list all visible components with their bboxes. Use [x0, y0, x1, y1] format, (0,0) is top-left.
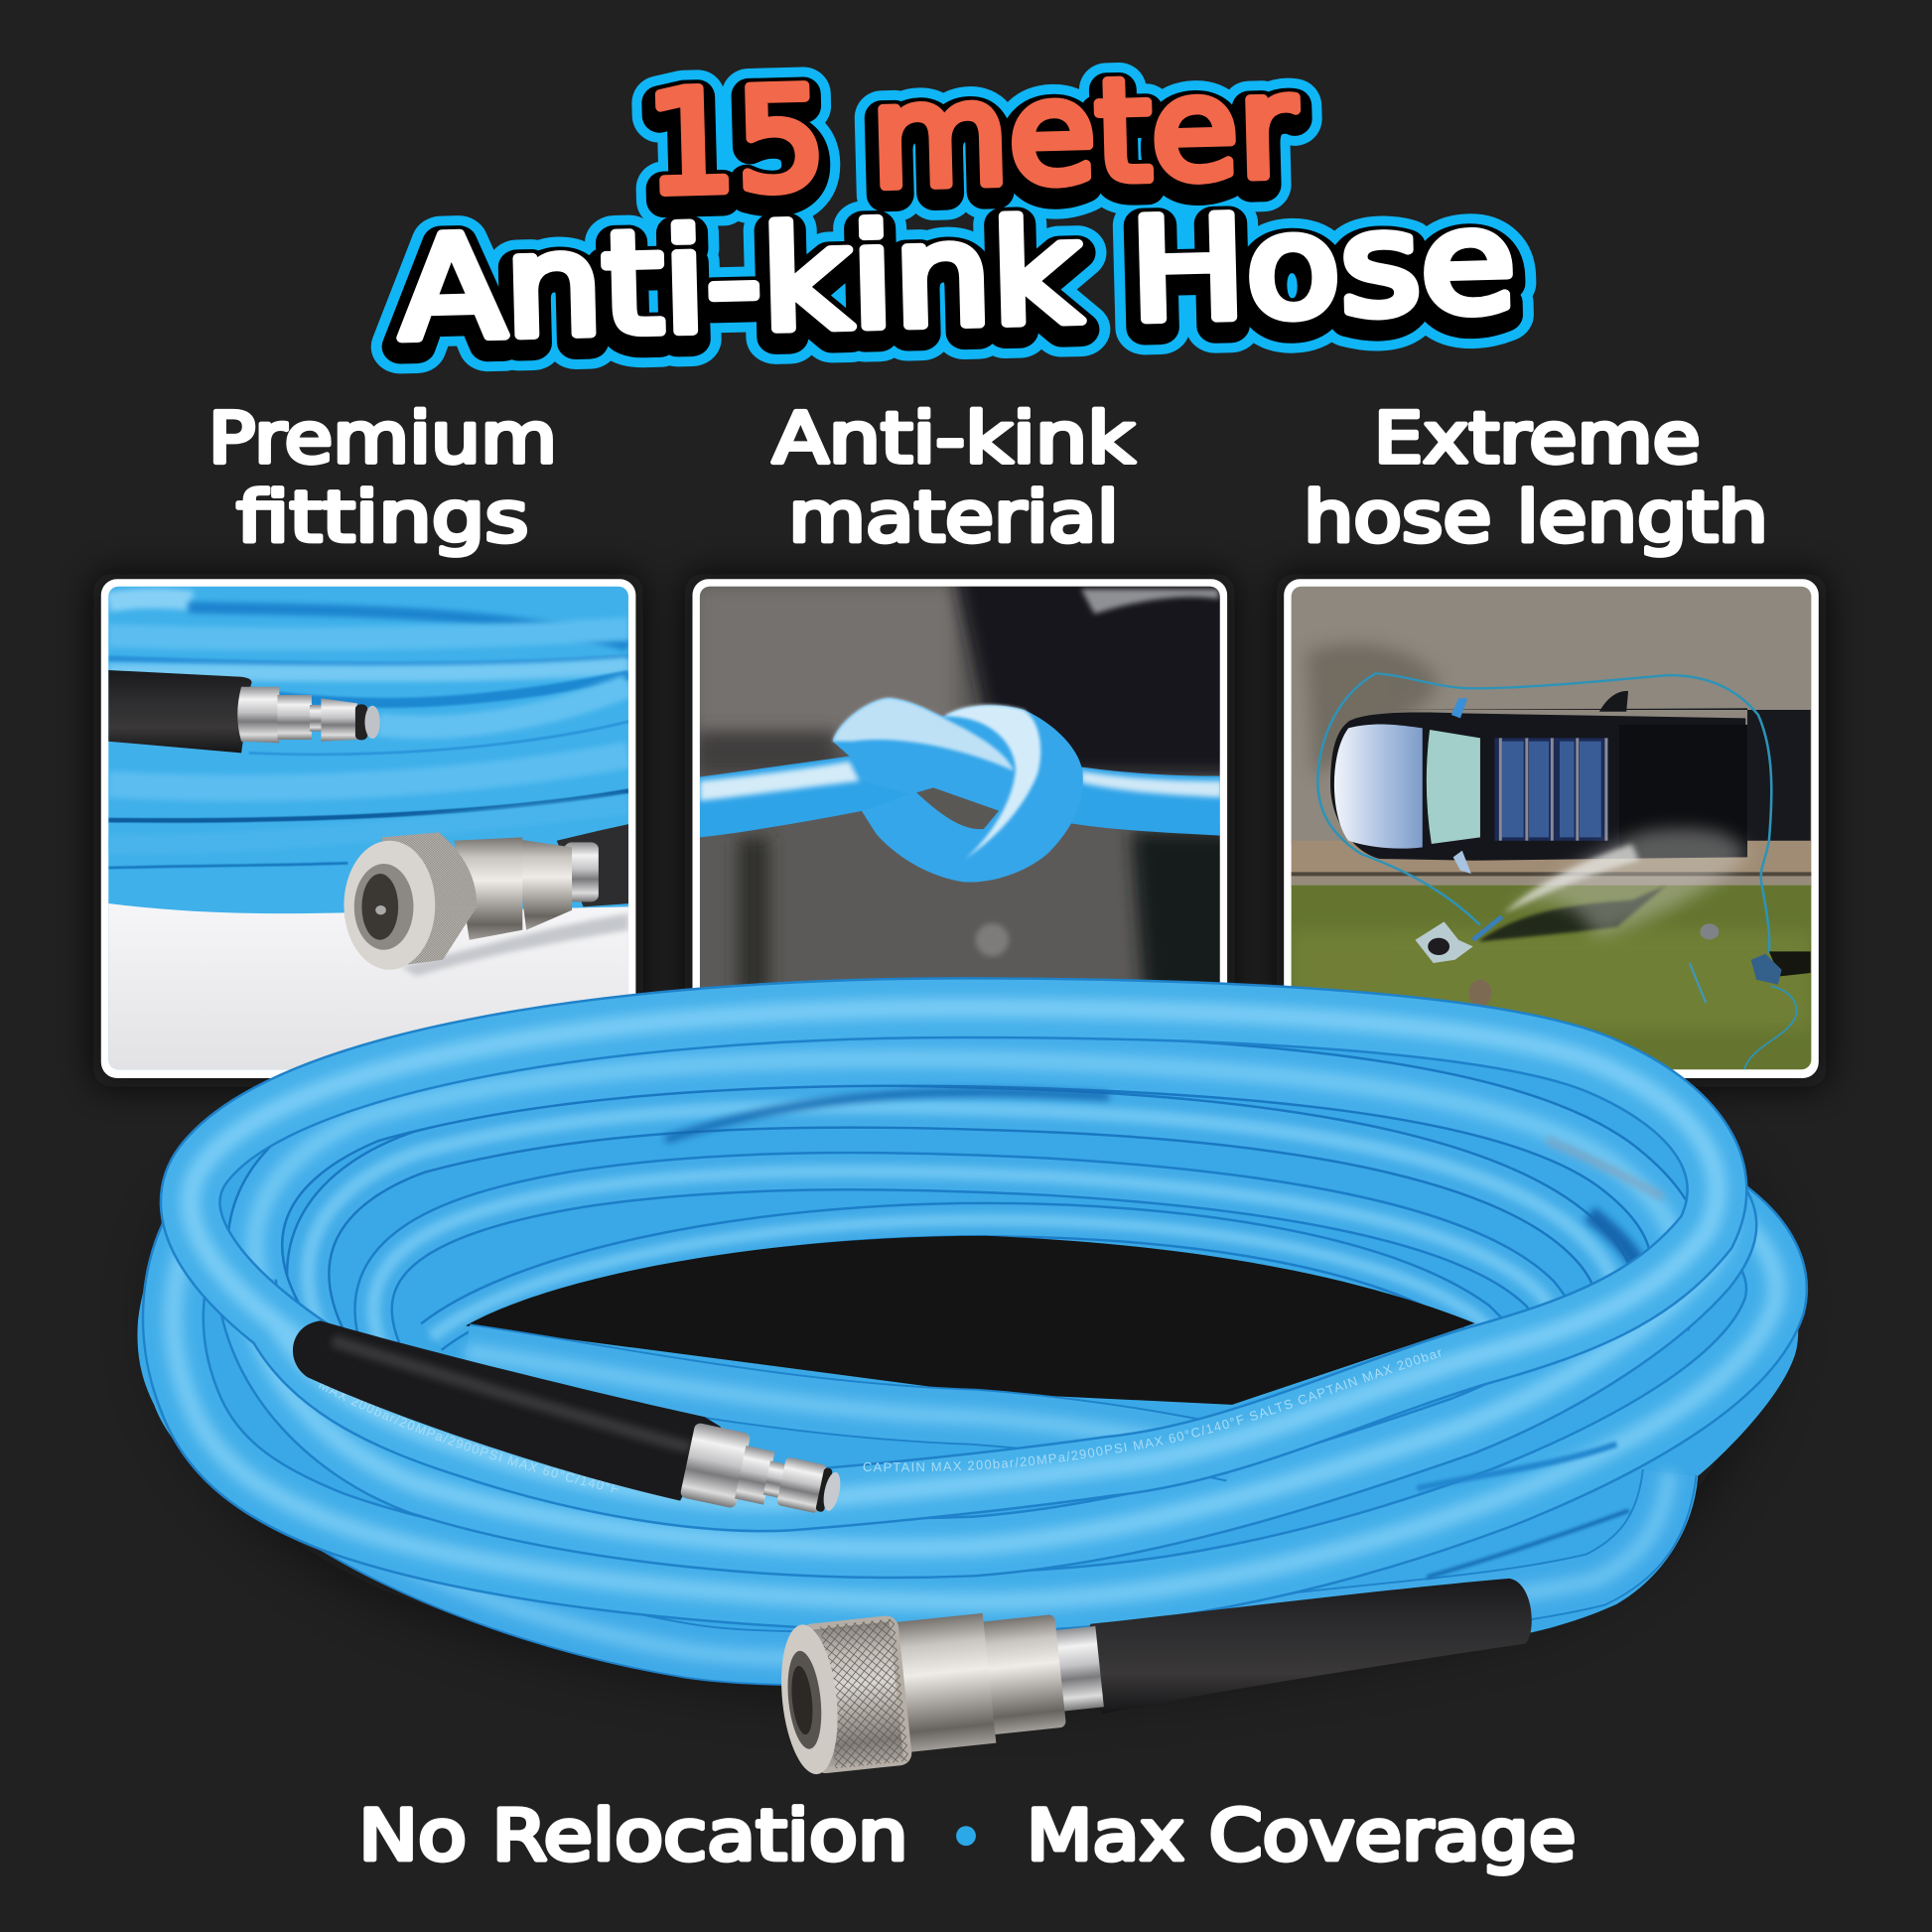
truck shadow — [1379, 708, 1811, 841]
panel: anti-kink material photo — [692, 579, 1227, 989]
heading: extreme hose length: hose length — [1304, 476, 1768, 558]
hose printing: CAPTAIN MAX 200bar/20MPa/2900PSI MAX 60°C/140°F SALTS CAPTAIN MAX 200bar — [864, 1349, 1442, 1471]
panel: extreme hose length photo — [1284, 579, 1819, 1078]
tagline separator dot — [956, 1826, 976, 1846]
coiled blue hose — [137, 977, 1809, 1775]
hose shadow — [167, 1075, 1763, 1690]
heading: anti-kink material — [772, 396, 1135, 558]
centre opening — [466, 1236, 1475, 1405]
title — [396, 46, 1517, 380]
sleeve sheen — [333, 1340, 690, 1448]
female fitting — [344, 824, 628, 970]
spray mist — [1504, 828, 1747, 936]
title: Anti-kink Hose — [397, 181, 1517, 371]
right hose run — [1064, 766, 1222, 836]
heading: extreme hose length: Extreme — [1374, 396, 1701, 479]
knot in hose — [700, 698, 1222, 883]
heading: premium fittings: fittings — [236, 476, 528, 558]
knot body — [833, 698, 1083, 883]
title: 15 meter — [642, 55, 1299, 234]
heading: premium fittings: Premium — [208, 396, 557, 479]
title: Anti-kink Hose — [396, 190, 1516, 380]
hose printing: MAX 200bar/20MPa/2900PSI MAX 60°C/140°F — [319, 1384, 620, 1492]
crevice shading on rear coils — [665, 1092, 1663, 1282]
black sleeve — [108, 670, 251, 753]
heading: premium fittings — [208, 396, 557, 558]
panel: premium fittings photo — [101, 579, 635, 1078]
person — [1415, 916, 1502, 963]
title: 15 meter — [643, 46, 1300, 225]
female quick-connect fitting — [774, 1594, 1108, 1777]
male fitting — [237, 687, 380, 743]
tagline — [358, 1794, 1576, 1876]
tagline: max coverage: Max Coverage — [1027, 1794, 1576, 1876]
coil base silhouette — [137, 983, 1798, 1678]
knot opening — [916, 787, 999, 829]
hose on ground — [1317, 673, 1771, 953]
rear coils — [255, 1058, 1678, 1355]
panel shadows — [93, 574, 1826, 1087]
front coils — [173, 1008, 1776, 1658]
person shadow — [1480, 886, 1666, 941]
lower black sleeve — [1086, 1579, 1532, 1714]
heading: extreme hose length — [1304, 396, 1768, 558]
hose printing — [319, 1349, 1442, 1492]
upper black sleeve — [293, 1320, 721, 1501]
crevice shading on front coils — [1417, 1445, 1629, 1578]
pressure washer — [1751, 951, 1811, 985]
left hose run — [700, 757, 862, 838]
tagline: no relocation: No Relocation — [358, 1794, 908, 1876]
title: Anti-kink Hose — [396, 190, 1516, 380]
male quick-connect fitting — [680, 1423, 848, 1529]
title: 15 meter — [642, 55, 1299, 234]
heading: anti-kink material: material — [788, 476, 1119, 558]
truck — [1330, 698, 1747, 874]
heading: anti-kink material: Anti-kink — [772, 396, 1135, 479]
